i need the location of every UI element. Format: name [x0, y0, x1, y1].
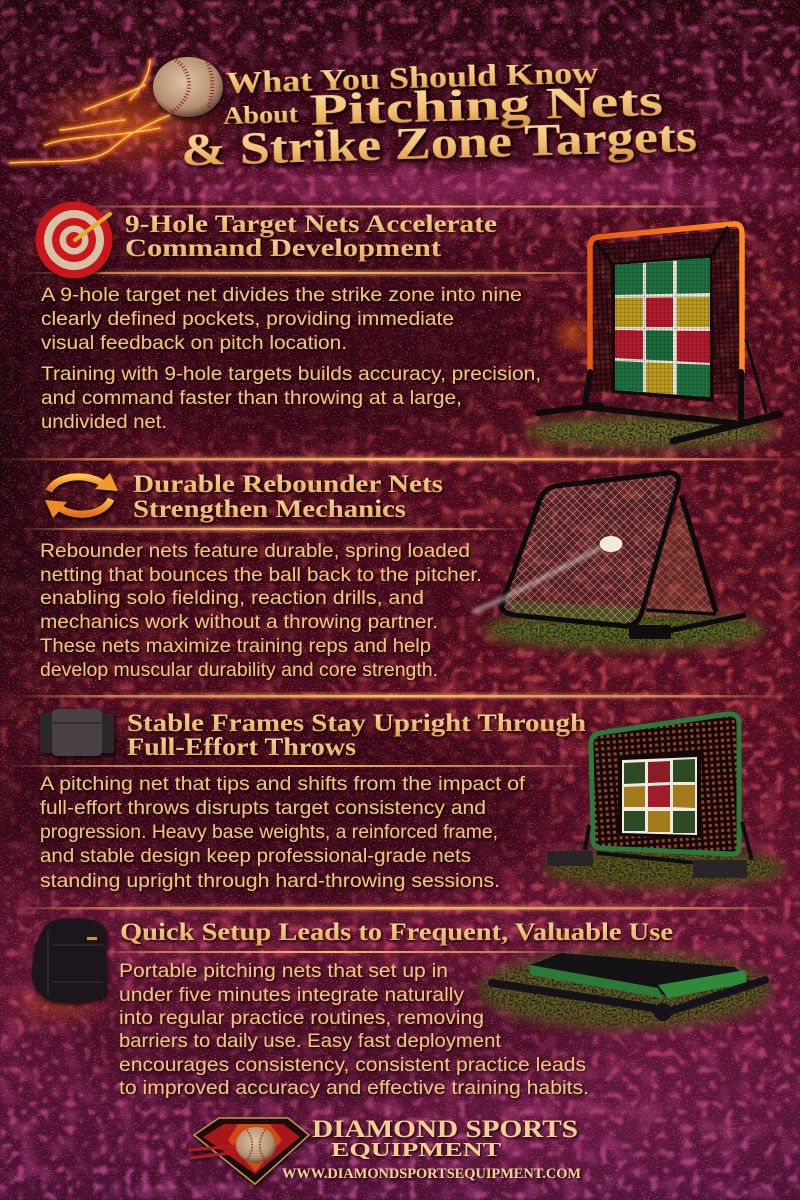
icon: rotating arrows	[45, 473, 118, 518]
heading: Strengthen Mechanics	[133, 496, 406, 523]
illustration: 9-hole target net	[525, 224, 780, 447]
heading: Stable Frames Stay Upright Through	[127, 710, 586, 737]
body text	[119, 960, 589, 1099]
body text: These nets maximize training reps and help	[40, 635, 431, 657]
wordmark: WWW.DIAMONDSPORTSEQUIPMENT.COM	[282, 1166, 581, 1182]
heading: Quick Setup Leads to Frequent, Valuable Use	[120, 919, 673, 946]
illustration: rebounder net	[472, 473, 765, 648]
illustration: stable framed net	[545, 714, 785, 887]
wordmark: EQUIPMENT	[331, 1139, 502, 1161]
body text: undivided net.	[41, 411, 167, 433]
body text	[41, 284, 541, 433]
body text: and stable design keep professional-grade nets	[40, 845, 471, 867]
panel: durable rebounder nets	[40, 471, 765, 681]
heading	[127, 710, 586, 761]
title: What You Should Know	[226, 55, 599, 100]
body text: under five minutes integrate naturally	[119, 984, 464, 1006]
panel: stable frames	[40, 709, 785, 892]
heading: Durable Rebounder Nets	[133, 471, 443, 498]
panel: quick setup	[32, 918, 770, 1099]
body text: develop muscular durability and core strength.	[40, 659, 438, 681]
icon: diamond with baseball	[188, 1118, 309, 1184]
body text: Rebounder nets feature durable, spring loaded	[40, 540, 470, 562]
divider rules	[0, 206, 800, 953]
body text	[40, 773, 526, 892]
wordmark: DIAMOND SPORTS	[312, 1116, 578, 1143]
heading	[133, 471, 443, 523]
body text: to improved accuracy and effective training habits.	[119, 1077, 589, 1099]
heading: Full-Effort Throws	[127, 734, 356, 761]
body text	[40, 540, 482, 681]
heading	[125, 211, 497, 262]
body text: progression. Heavy base weights, a reinforced frame,	[40, 821, 498, 843]
body text: standing upright through hard-throwing sessions.	[40, 870, 500, 892]
title	[179, 52, 698, 175]
heading: Command Development	[125, 235, 442, 262]
wordmark	[282, 1116, 581, 1182]
title: Pitching Nets	[309, 76, 663, 135]
body text: encourages consistency, consistent practice leads	[119, 1054, 586, 1076]
body text: Portable pitching nets that set up in	[119, 960, 448, 982]
icon: target with dart	[36, 202, 112, 278]
illustration: folded portable net	[480, 952, 770, 1028]
body text: Training with 9-hole targets builds accuracy, precision,	[41, 363, 541, 385]
icon: baseball	[153, 57, 223, 117]
body text: clearly defined pockets, providing immediate	[41, 308, 454, 330]
body text: A pitching net that tips and shifts from the impact of	[40, 773, 526, 795]
body text: enabling solo fielding, reaction drills, and	[40, 587, 424, 609]
body text: netting that bounces the ball back to the pitcher.	[40, 564, 482, 586]
body text: and command faster than throwing at a large,	[41, 387, 462, 409]
body text: into regular practice routines, removing	[119, 1007, 484, 1029]
body text: A 9-hole target net divides the strike zone into nine	[41, 284, 522, 306]
icon: backpack	[32, 918, 107, 1003]
heading: 9-Hole Target Nets Accelerate	[125, 211, 497, 238]
body text: full-effort throws disrupts target consistency and	[40, 797, 486, 819]
panel: 9-hole target nets	[36, 202, 780, 447]
fire streaks behind baseball	[10, 60, 230, 180]
body text: barriers to daily use. Easy fast deployment	[119, 1030, 502, 1052]
body text: mechanics work without a throwing partner.	[40, 611, 438, 633]
title: & Strike Zone Targets	[180, 111, 698, 175]
body text: visual feedback on pitch location.	[41, 332, 347, 354]
icon: base weight bag	[40, 709, 114, 756]
title: About	[223, 101, 299, 130]
logo: diamond sports equipment	[188, 1116, 581, 1184]
